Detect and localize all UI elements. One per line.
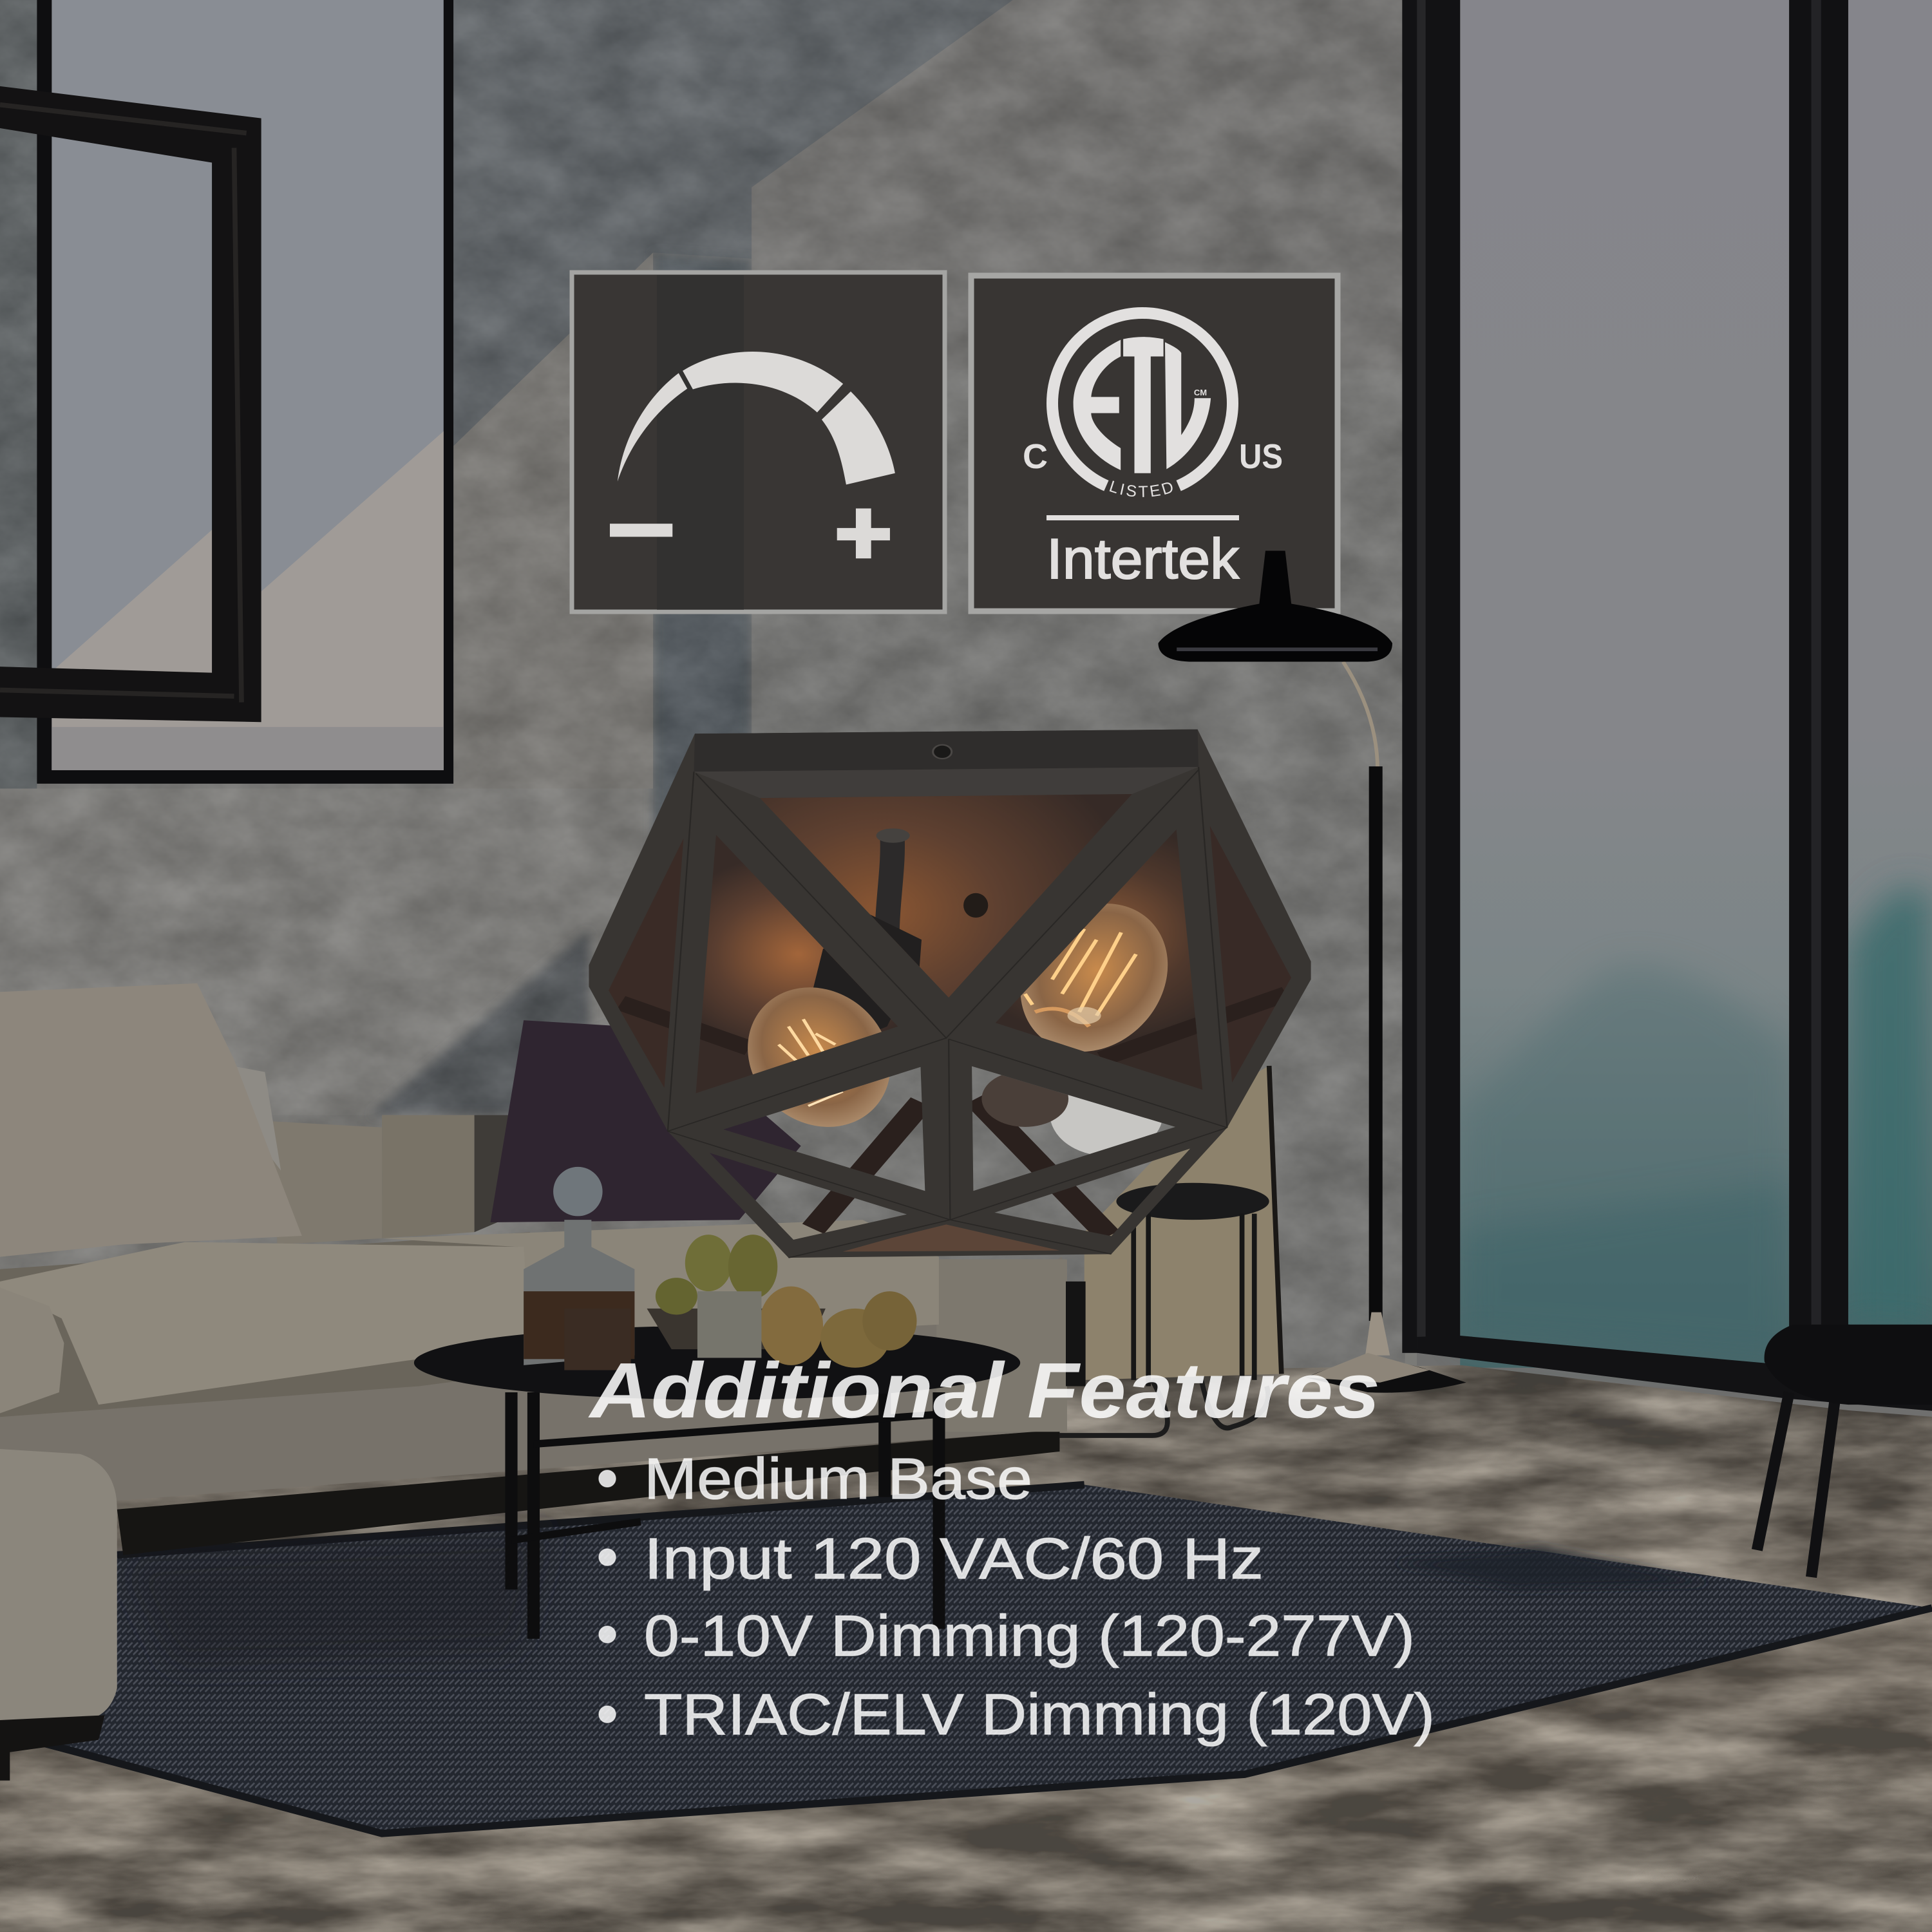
- window glass with foggy forest: [1460, 0, 1932, 1368]
- sofa: [0, 983, 1067, 1555]
- feature: input voltage: Input 120 VAC/60 Hz: [644, 1527, 1264, 1591]
- floor lamp: [1159, 551, 1466, 1393]
- label: C: C: [1023, 437, 1048, 476]
- icon: ETL listed mark: CM: [1194, 388, 1207, 397]
- coffee table with decanter and fruit: [414, 1167, 1020, 1639]
- label: Intertek: Intertek: [1046, 527, 1240, 591]
- bottom panel: [843, 1224, 1059, 1251]
- inner bars seen through lower cage: [813, 1099, 1109, 1236]
- purple cushion: [490, 1020, 801, 1222]
- side panel right: [1210, 826, 1291, 1083]
- cage frame: [589, 730, 1311, 1258]
- table top: [414, 1326, 1020, 1400]
- sofa ottoman: [0, 1449, 117, 1781]
- decanter: [524, 1167, 634, 1370]
- screw: [933, 745, 952, 759]
- dark wooden frame: [0, 86, 261, 722]
- feature: 0-10V dimming: 0-10V Dimming (120-277V): [644, 1604, 1415, 1669]
- label: US: US: [1239, 437, 1283, 476]
- cream throw pillow: [0, 983, 302, 1257]
- framed mat on wall: [37, 0, 453, 784]
- warm interior top: [760, 794, 1132, 998]
- icon: ETL listed mark: LISTED: [1109, 480, 1173, 497]
- feature: medium base: Medium Base: [644, 1447, 1032, 1511]
- side panel left: [609, 838, 683, 1088]
- woven rug: [31, 1485, 1932, 1833]
- easel canvas and side table: [1059, 1066, 1282, 1435]
- right bulb: [1000, 892, 1188, 1063]
- top bevel: [694, 767, 1198, 798]
- table legs: [511, 1392, 939, 1639]
- left bulb: [731, 978, 907, 1137]
- heading: Additional Features: Additional Features: [588, 1347, 1380, 1434]
- icon: ETL listed mark: [1046, 307, 1238, 497]
- top plate: [694, 730, 1198, 772]
- feature: TRIAC/ELV dimming: TRIAC/ELV Dimming (120V): [644, 1683, 1435, 1747]
- badge: dimmable: [572, 272, 945, 612]
- geometric ceiling light fixture: [589, 730, 1311, 1258]
- concrete floor: [0, 1352, 1932, 1932]
- stem and socket: [808, 828, 988, 1045]
- warm interior right: [996, 829, 1202, 1090]
- window frame posts: [1402, 0, 1932, 1411]
- feature list: [599, 1447, 1435, 1747]
- warm interior left: [696, 835, 898, 1094]
- icon: dimmer gauge: [610, 352, 895, 558]
- lower socket and white shade seen through cage: [981, 1070, 1163, 1156]
- cage ribs: [668, 767, 1227, 1258]
- inner side bars: [621, 994, 1286, 1059]
- concrete wall: [0, 0, 1417, 1417]
- stool: [1757, 1325, 1932, 1577]
- fruit bowl: [647, 1235, 916, 1368]
- badge: ETL Intertek certification: [969, 273, 1341, 614]
